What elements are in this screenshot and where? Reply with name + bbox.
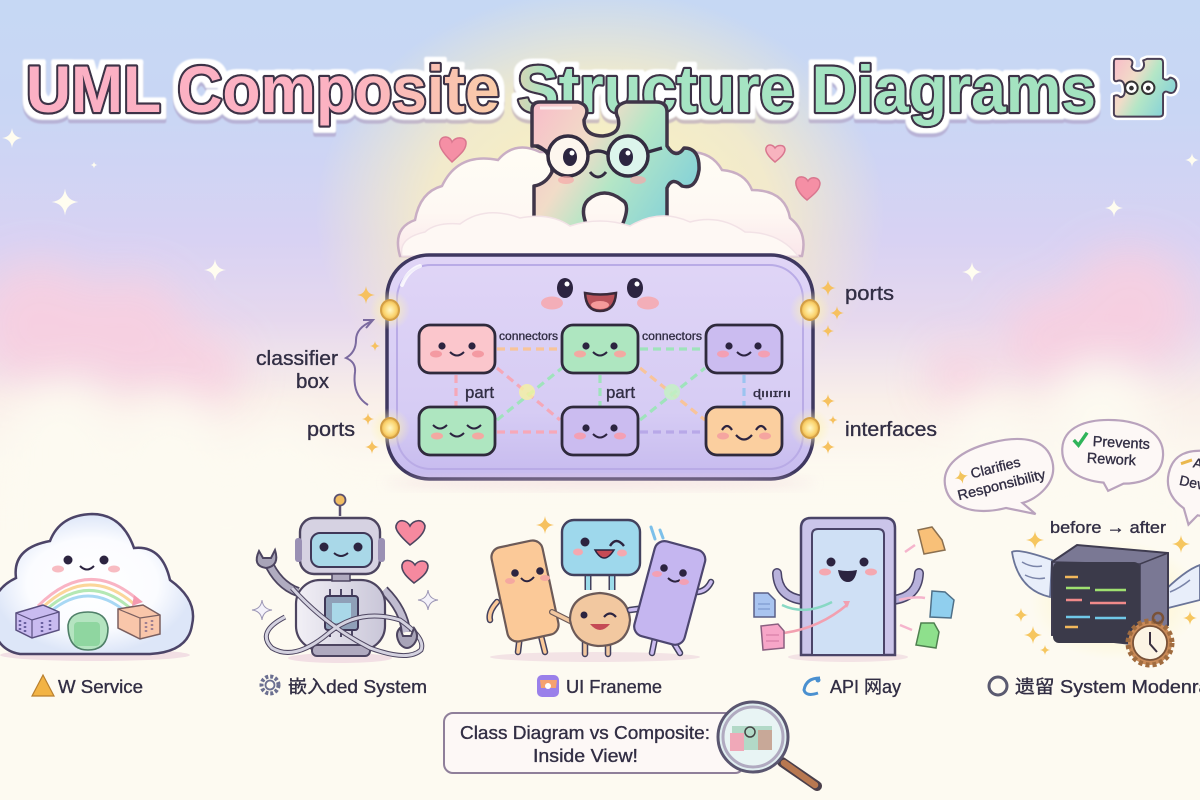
label: interfaces: interfaces xyxy=(845,419,937,441)
callout: class diagram vs composite: Inside View! xyxy=(533,746,638,766)
gold sparkles around box xyxy=(357,280,844,454)
part: purple xyxy=(706,325,782,373)
purple block xyxy=(630,539,711,653)
part: purple lower xyxy=(562,407,638,455)
bubble: prevents rework: Prevents xyxy=(1092,434,1150,453)
cloud front puffs xyxy=(401,213,798,256)
connector labels: part xyxy=(606,383,635,402)
bubble: prevents rework xyxy=(1060,417,1165,494)
panel: classifier box xyxy=(387,255,813,479)
label: before after: before → after xyxy=(1050,518,1166,537)
part: green sleeping xyxy=(419,407,495,455)
label: legacy modernization: 遗留 System Modenrat xyxy=(1015,677,1200,697)
connectors xyxy=(456,349,744,432)
part: orange xyxy=(706,407,782,455)
label: classifier box: classifier xyxy=(256,348,338,370)
connector labels: connectors xyxy=(642,329,702,343)
part: green xyxy=(562,325,638,373)
title: UML Composite Structure Diagrams xyxy=(26,52,1096,126)
label: embedded system: 嵌入ded System xyxy=(288,677,427,697)
connector labels xyxy=(465,329,791,402)
callout: class diagram vs composite xyxy=(444,713,744,773)
icon: title puzzle xyxy=(1114,59,1176,117)
bubble: clarifies responsibility: Clarifies xyxy=(969,454,1022,481)
sparkles in sky xyxy=(2,128,1199,282)
bubble: clarifies responsibility: Responsibility xyxy=(956,466,1047,503)
bubble: prevents rework: Rework xyxy=(1086,451,1137,469)
box floor shadow xyxy=(385,477,815,489)
ports xyxy=(370,290,830,448)
blue block xyxy=(562,520,640,590)
connector labels: connectors xyxy=(499,329,558,343)
label: classifier box: box xyxy=(296,371,329,393)
label: classifier box xyxy=(256,348,338,393)
glasses and eyes xyxy=(536,136,662,184)
hearts xyxy=(440,137,820,200)
mascot: puzzle piece with glasses xyxy=(532,102,699,234)
tan blob xyxy=(552,593,630,654)
part: pink xyxy=(419,325,495,373)
connector labels: part xyxy=(465,383,494,402)
label: web service: W Service xyxy=(58,677,143,697)
cloud behind mascot xyxy=(398,148,804,256)
label: UI framework xyxy=(537,675,662,697)
label: ports left: ports xyxy=(307,419,355,441)
bubble: accelerates delivery (clipped) xyxy=(1159,444,1200,533)
mascot face on box xyxy=(541,278,659,311)
icon: magnifying glass xyxy=(718,702,817,786)
connector labels: ɖıııɪrıı xyxy=(753,388,791,400)
label: API gateway: API 网ay xyxy=(830,677,901,697)
classifier brace arrow xyxy=(346,320,373,405)
label: web service xyxy=(32,675,143,697)
callout: class diagram vs composite: Class Diagram vs Composite: xyxy=(460,723,710,743)
illustration: legacy system with wings xyxy=(1012,531,1200,665)
illustration: UI framework friends xyxy=(490,516,711,662)
label: UI framework: UI Franeme xyxy=(566,677,662,697)
illustration: web service cloud xyxy=(0,514,193,661)
bubble: clarifies responsibility xyxy=(938,429,1064,534)
illustration: robot xyxy=(252,494,438,663)
label: ports right: ports xyxy=(845,283,894,305)
orange block xyxy=(490,539,560,652)
illustration: API gateway door xyxy=(754,518,954,662)
